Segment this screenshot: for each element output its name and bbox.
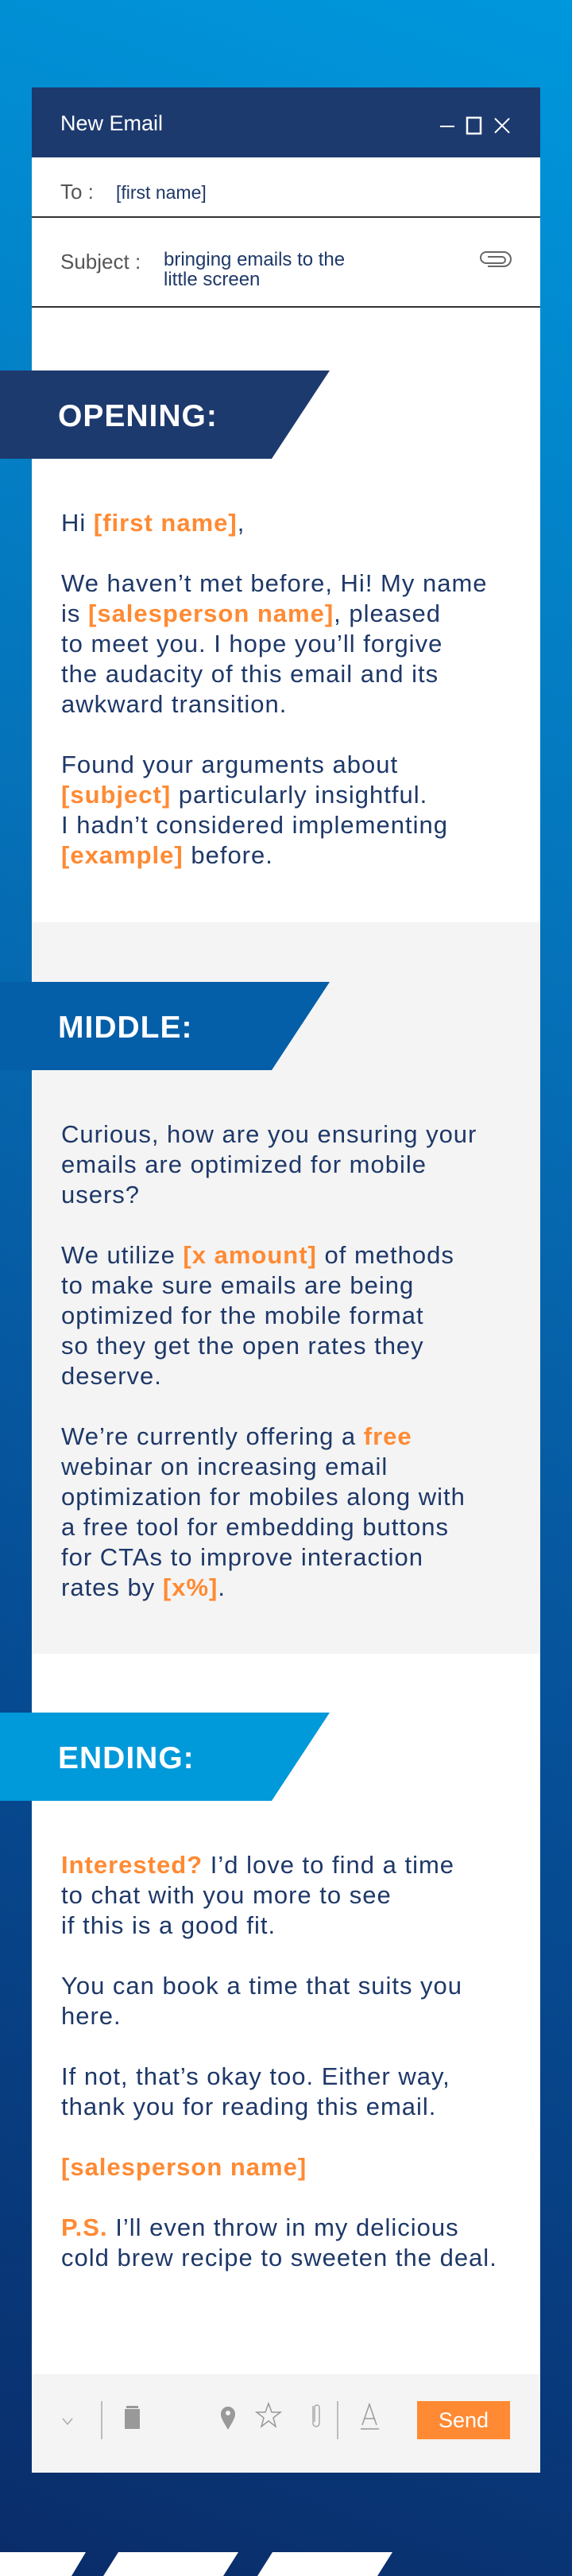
text: opening body: is [salesperson name], pleased bbox=[61, 599, 441, 627]
text: ending body: You can book a time that suits you bbox=[61, 1972, 462, 2000]
text: ending body: to chat with you more to see bbox=[61, 1881, 392, 1909]
text: ending body: P.S. I’ll even throw in my delicious bbox=[61, 2213, 459, 2241]
text: middle body: emails are optimized for mobile bbox=[61, 1150, 427, 1178]
subject field bbox=[32, 218, 540, 308]
send button: Send bbox=[439, 2408, 489, 2432]
icon: paperclip bbox=[480, 251, 512, 267]
text: ending body: cold brew recipe to sweeten the deal. bbox=[61, 2244, 497, 2271]
text: middle body: deserve. bbox=[61, 1362, 162, 1390]
subject field: Subject : bbox=[60, 250, 141, 274]
text: ending body: thank you for reading this email. bbox=[61, 2093, 436, 2120]
banner: ending bbox=[0, 1713, 330, 1801]
to field bbox=[32, 157, 540, 218]
title bar bbox=[32, 87, 540, 157]
text: ending body: [salesperson name] bbox=[61, 2153, 307, 2181]
to field: [first name] bbox=[116, 182, 207, 203]
subject field: bringing emails to the bbox=[164, 249, 345, 270]
text: ending body: here. bbox=[61, 2002, 122, 2030]
text: opening body: Hi [first name], bbox=[61, 509, 245, 537]
text: opening body: to meet you. I hope you’ll forgive bbox=[61, 630, 443, 658]
text: opening body: [subject] particularly insightful. bbox=[61, 781, 427, 809]
text: middle body: so they get the open rates they bbox=[61, 1332, 424, 1360]
banner: opening: OPENING: bbox=[58, 399, 218, 433]
to field: To : bbox=[60, 180, 94, 204]
middle section background bbox=[32, 922, 540, 1654]
text: ending body: if this is a good fit. bbox=[61, 1911, 276, 1939]
text: opening body: [example] before. bbox=[61, 841, 273, 869]
text: ending body: Interested? I’d love to find a time bbox=[61, 1851, 454, 1879]
text: middle body: optimization for mobiles along with bbox=[61, 1483, 466, 1511]
text: opening body bbox=[61, 509, 488, 869]
toolbar bbox=[32, 2374, 540, 2473]
icon: window controls bbox=[440, 116, 510, 135]
text: middle body: Curious, how are you ensuring your bbox=[61, 1120, 477, 1148]
text: opening body: the audacity of this email and its bbox=[61, 660, 439, 688]
banner: middle bbox=[0, 982, 330, 1070]
text: ending body bbox=[61, 1851, 497, 2271]
text: middle body: for CTAs to improve interaction bbox=[61, 1543, 423, 1571]
text: middle body: to make sure emails are being bbox=[61, 1271, 414, 1299]
text: middle body: We utilize [x amount] of methods bbox=[61, 1241, 454, 1269]
text: opening body: I hadn’t considered implementing bbox=[61, 811, 448, 839]
banner: ending: ENDING: bbox=[58, 1741, 195, 1775]
text: opening body: We haven’t met before, Hi! My name bbox=[61, 569, 488, 597]
subject field: little screen bbox=[164, 269, 260, 290]
text: middle body: a free tool for embedding buttons bbox=[61, 1513, 449, 1541]
text: opening body: awkward transition. bbox=[61, 690, 287, 718]
text: middle body: We’re currently offering a free bbox=[61, 1422, 412, 1450]
text: opening body: Found your arguments about bbox=[61, 751, 398, 778]
banner: middle: MIDDLE: bbox=[58, 1011, 192, 1045]
banner: opening bbox=[0, 370, 330, 459]
decorative white stripes bbox=[0, 2552, 392, 2576]
title: New Email: New Email bbox=[60, 111, 163, 135]
text: middle body bbox=[61, 1120, 477, 1601]
text: ending body: If not, that’s okay too. Either way, bbox=[61, 2062, 450, 2090]
text: middle body: optimized for the mobile format bbox=[61, 1302, 424, 1329]
send button bbox=[417, 2401, 510, 2439]
text: middle body: webinar on increasing email bbox=[61, 1453, 388, 1480]
text: middle body: users? bbox=[61, 1181, 140, 1208]
text: middle body: rates by [x%]. bbox=[61, 1573, 226, 1601]
